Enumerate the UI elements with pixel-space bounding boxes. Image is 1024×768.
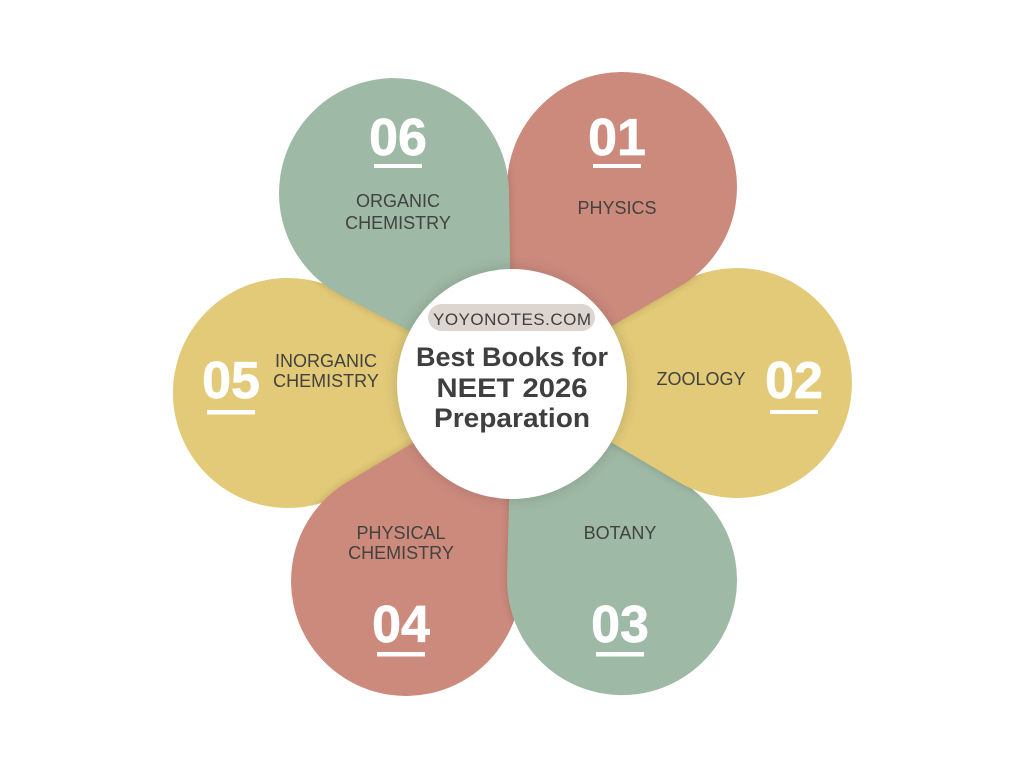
site badge: YOYONOTES.COM	[433, 310, 591, 329]
flower infographic	[172, 72, 852, 696]
underline 03	[596, 652, 644, 656]
title: Preparation	[434, 403, 590, 433]
petal 06: organic chemistry	[345, 109, 451, 233]
petal 05: inorganic chemistry	[202, 351, 379, 414]
label inorganic chemistry: CHEMISTRY	[273, 371, 379, 391]
label botany: BOTANY	[584, 523, 656, 543]
label organic chemistry: CHEMISTRY	[345, 213, 451, 233]
petal 03: botany	[584, 523, 656, 656]
petal shape: 06 organic chemistry	[279, 78, 512, 384]
petal shape: 03 botany	[507, 384, 737, 695]
title: NEET 2026	[436, 373, 588, 403]
number 04: 04	[372, 596, 430, 654]
underline 01	[593, 164, 641, 168]
underline 04	[377, 652, 425, 656]
underline 05	[207, 410, 255, 414]
underline 02	[770, 410, 818, 414]
number 03: 03	[591, 596, 649, 654]
label inorganic chemistry: INORGANIC	[275, 351, 377, 371]
petal 02: zoology	[656, 352, 823, 414]
label organic chemistry: ORGANIC	[356, 191, 440, 211]
label physical chemistry: CHEMISTRY	[348, 543, 454, 563]
underline 06	[374, 164, 422, 168]
number 02: 02	[765, 352, 823, 410]
number 05: 05	[202, 352, 260, 410]
centre circle	[397, 269, 627, 499]
number 01: 01	[588, 109, 646, 167]
label physics: PHYSICS	[577, 198, 657, 218]
label zoology: ZOOLOGY	[656, 369, 746, 389]
petal 04: physical chemistry	[348, 523, 454, 656]
title	[416, 342, 608, 433]
petal shape: 05 inorganic chemistry	[173, 278, 512, 508]
petal shape: 02 zoology	[512, 268, 852, 498]
title: Best Books for	[416, 342, 608, 372]
petal shape: 01 physics	[507, 72, 737, 384]
petal 01: physics	[577, 109, 657, 218]
site badge	[428, 304, 595, 331]
petal shape: 04 physical chemistry	[291, 384, 521, 696]
number 06: 06	[369, 109, 427, 167]
label physical chemistry: PHYSICAL	[356, 523, 446, 543]
